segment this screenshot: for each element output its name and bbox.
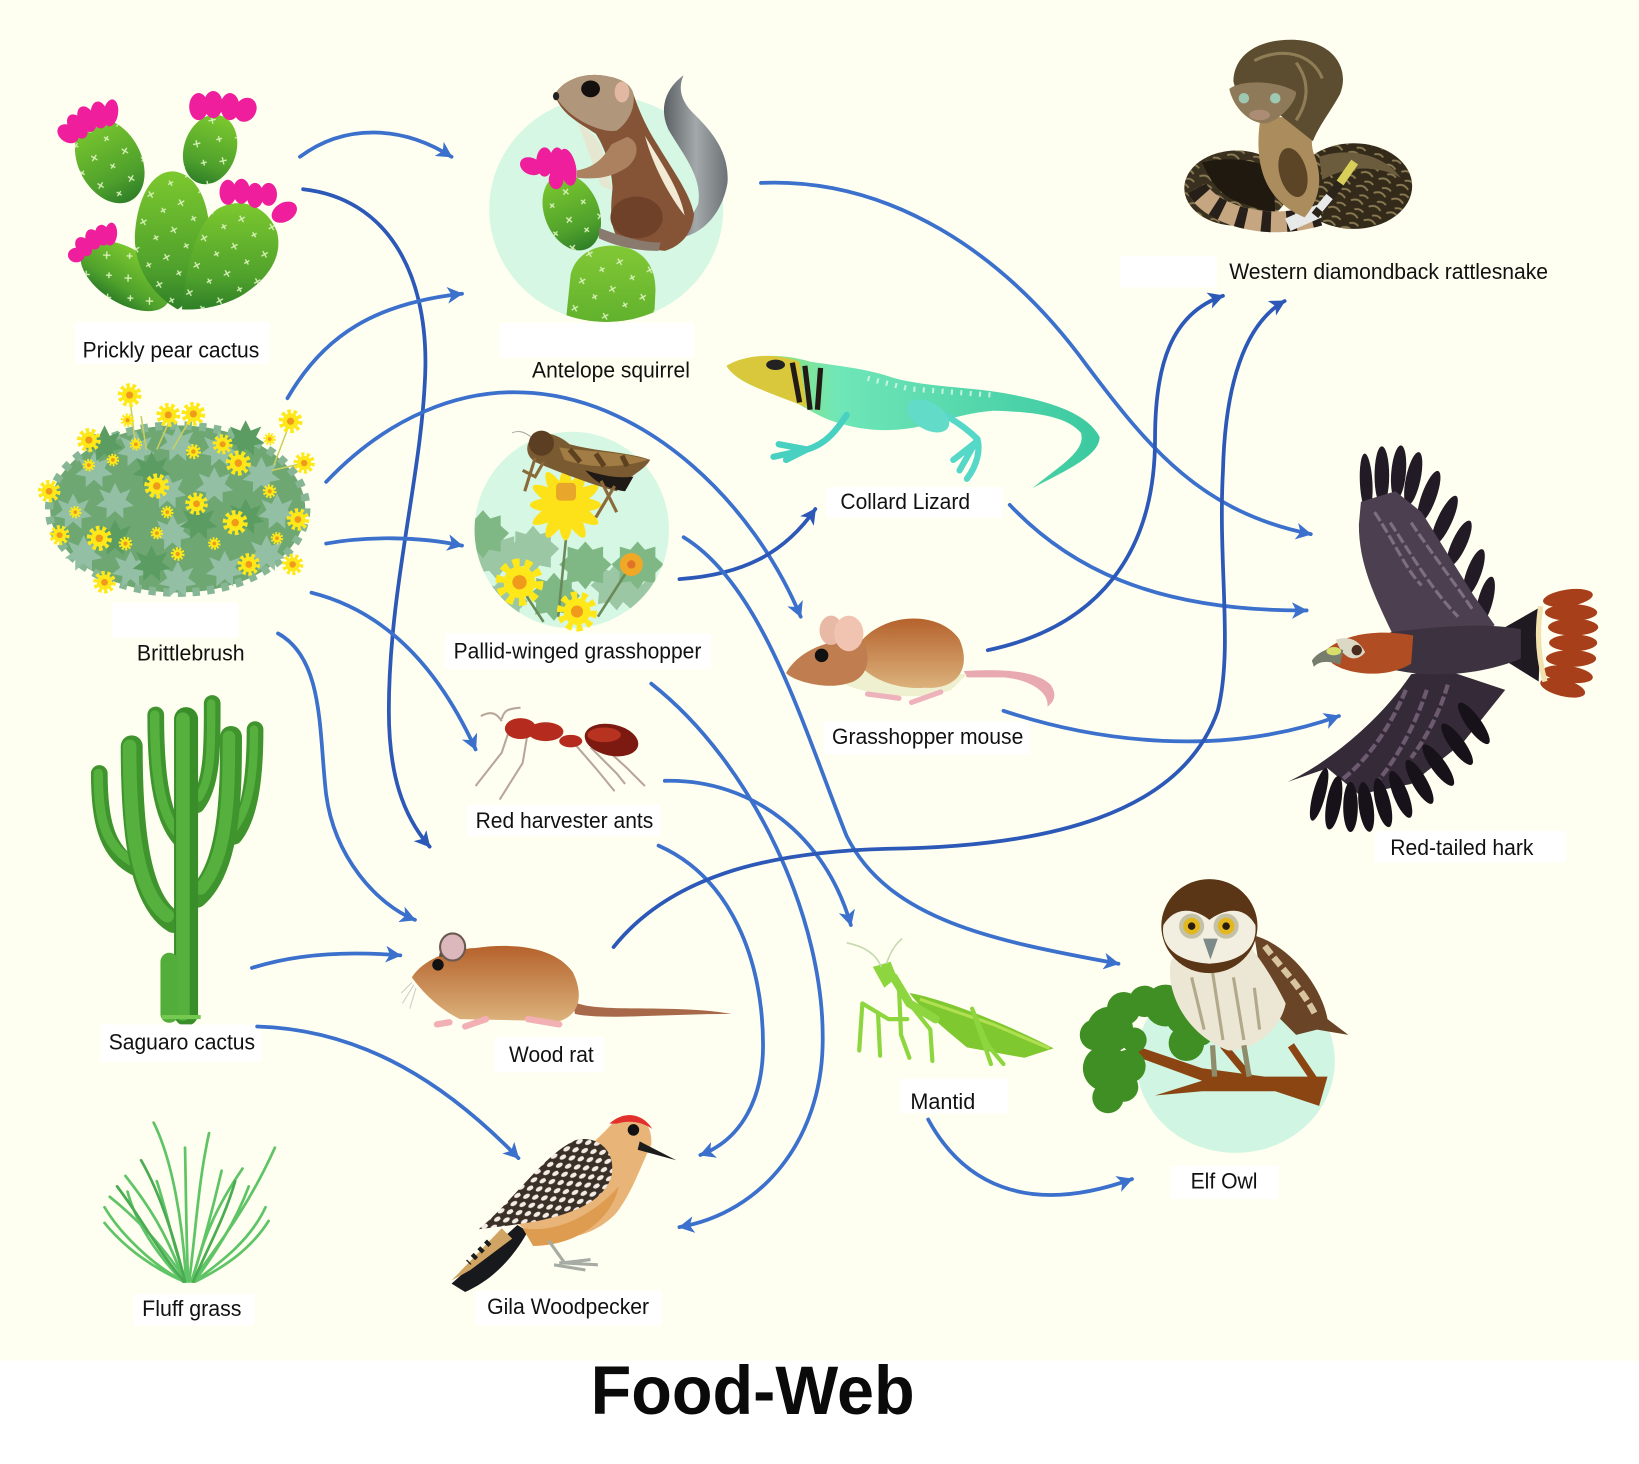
- illustration: pallid-winged grasshopper: [457, 431, 674, 628]
- arrow: ants to mantid: [665, 781, 851, 925]
- body: [1390, 626, 1521, 674]
- illustration: prickly pear cactus: [54, 91, 301, 326]
- owl body: [1170, 946, 1286, 1050]
- body and head: [512, 1115, 651, 1238]
- tail: [1505, 606, 1542, 682]
- arrow: grasshopper to woodpecker: [651, 684, 823, 1227]
- grasshopper: [527, 433, 650, 491]
- squirrel arm: [577, 137, 637, 178]
- coil: [1184, 151, 1289, 226]
- label: brittlebrush: [112, 603, 245, 666]
- cactus on a circle: [566, 246, 656, 322]
- upper wing: [1359, 491, 1495, 669]
- tail: [664, 75, 728, 238]
- label: wood rat: Wood rat: [509, 1042, 594, 1067]
- tail bands: [1197, 188, 1319, 222]
- arrow: wood rat to rattlesnake: [614, 301, 1285, 947]
- illustration: western diamondback rattlesnake: [1184, 40, 1412, 229]
- label: saguaro cactus: Saguaro cactus: [109, 1029, 255, 1054]
- illustration: saguaro cactus: [98, 703, 255, 1017]
- label: antelope squirrel: [500, 323, 694, 382]
- label: saguaro cactus: [100, 1024, 261, 1062]
- arrow: brittlebrush to grasshopper mouse: [326, 392, 801, 617]
- illustration: antelope squirrel: [489, 75, 728, 334]
- wing: [479, 1139, 612, 1229]
- leaves: [1080, 985, 1213, 1113]
- label: red-tailed hark: Red-tailed hark: [1390, 835, 1533, 860]
- label: fluff grass: [134, 1294, 254, 1325]
- arrow: prickly pear to wood rat: [303, 189, 430, 847]
- illustration: red harvester ant: [476, 708, 645, 800]
- label: brittlebrush: Brittlebrush: [137, 641, 245, 666]
- pink flower in paw: [517, 147, 580, 189]
- head: [1322, 633, 1413, 674]
- label: red-tailed hark: [1375, 831, 1566, 862]
- illustration: brittlebrush: [41, 386, 312, 597]
- label: gila woodpecker: [476, 1291, 662, 1325]
- illustration: grasshopper mouse: [786, 616, 1054, 707]
- neck: [1258, 117, 1319, 217]
- label: elf owl: Elf Owl: [1191, 1168, 1257, 1193]
- tail: [452, 1225, 528, 1292]
- illustration: wood rat: [401, 933, 732, 1026]
- label: collard lizard: Collard Lizard: [840, 489, 970, 514]
- arrow: grasshopper to lizard: [679, 509, 815, 579]
- label: collard lizard: [827, 487, 1002, 517]
- illustration: fluff grass: [105, 1123, 275, 1281]
- squirrel stripe: [645, 136, 685, 215]
- arrow: brittlebrush to squirrel: [287, 294, 462, 398]
- pink flowers: [54, 91, 301, 262]
- arrow: brittlebrush to ants: [311, 593, 476, 749]
- label: antelope squirrel: Antelope squirrel: [532, 357, 690, 382]
- arrow: squirrel to hawk: [761, 183, 1311, 534]
- arrow: brittlebrush to wood rat: [278, 633, 415, 920]
- label: western diamondback rattlesnake: Western diamondback rattlesnake: [1229, 259, 1548, 284]
- illustration: mantid: [847, 939, 1054, 1064]
- arrow: mantid to owl: [928, 1119, 1132, 1195]
- arrow: ants to woodpecker: [659, 846, 763, 1155]
- wing and tail: [1254, 936, 1348, 1035]
- upper wing feathers: [1358, 445, 1499, 627]
- label: prickly pear cactus: Prickly pear cactus: [83, 337, 259, 362]
- label: prickly pear cactus: [75, 322, 270, 364]
- hood: [1233, 40, 1343, 141]
- illustration: red-tailed hawk: [1288, 445, 1598, 833]
- label: mantid: [900, 1079, 1009, 1114]
- yellow flowers: [529, 468, 602, 542]
- label: red harvester ants: Red harvester ants: [476, 808, 653, 833]
- illustration: elf owl: [1080, 879, 1348, 1153]
- branch: [1134, 1045, 1328, 1106]
- arrow: saguaro to wood rat: [252, 953, 400, 968]
- label: wood rat: [494, 1037, 604, 1072]
- label: gila woodpecker: Gila Woodpecker: [487, 1294, 649, 1319]
- feet: [549, 1241, 598, 1270]
- arrow: grasshopper to owl: [684, 537, 1118, 964]
- arrow: prickly pear to squirrel: [300, 132, 452, 157]
- label: elf owl: [1171, 1165, 1278, 1199]
- owl head: [1161, 879, 1257, 973]
- label: pallid-winged grasshopper: [445, 633, 711, 669]
- arrow: mouse to rattlesnake: [988, 296, 1223, 650]
- arrow: mouse to hawk: [1003, 711, 1339, 741]
- lower wing: [1288, 669, 1505, 794]
- body: [555, 75, 694, 251]
- label: fluff grass: Fluff grass: [142, 1296, 241, 1321]
- label: western diamondback rattlesnake: [1119, 256, 1548, 287]
- arrow: lizard to hawk: [1010, 505, 1307, 610]
- label: grasshopper mouse: Grasshopper mouse: [832, 724, 1023, 749]
- arrow: brittlebrush to grasshopper: [326, 538, 462, 546]
- label: mantid: Mantid: [910, 1089, 975, 1114]
- illustration: collard lizard: [726, 356, 1100, 488]
- title: Food-Web: [591, 1352, 915, 1429]
- label: pallid-winged grasshopper: Pallid-winged grasshopper: [454, 639, 701, 664]
- head: [1229, 82, 1296, 123]
- illustration: gila woodpecker: [452, 1115, 676, 1292]
- arrow: saguaro to woodpecker: [257, 1026, 518, 1158]
